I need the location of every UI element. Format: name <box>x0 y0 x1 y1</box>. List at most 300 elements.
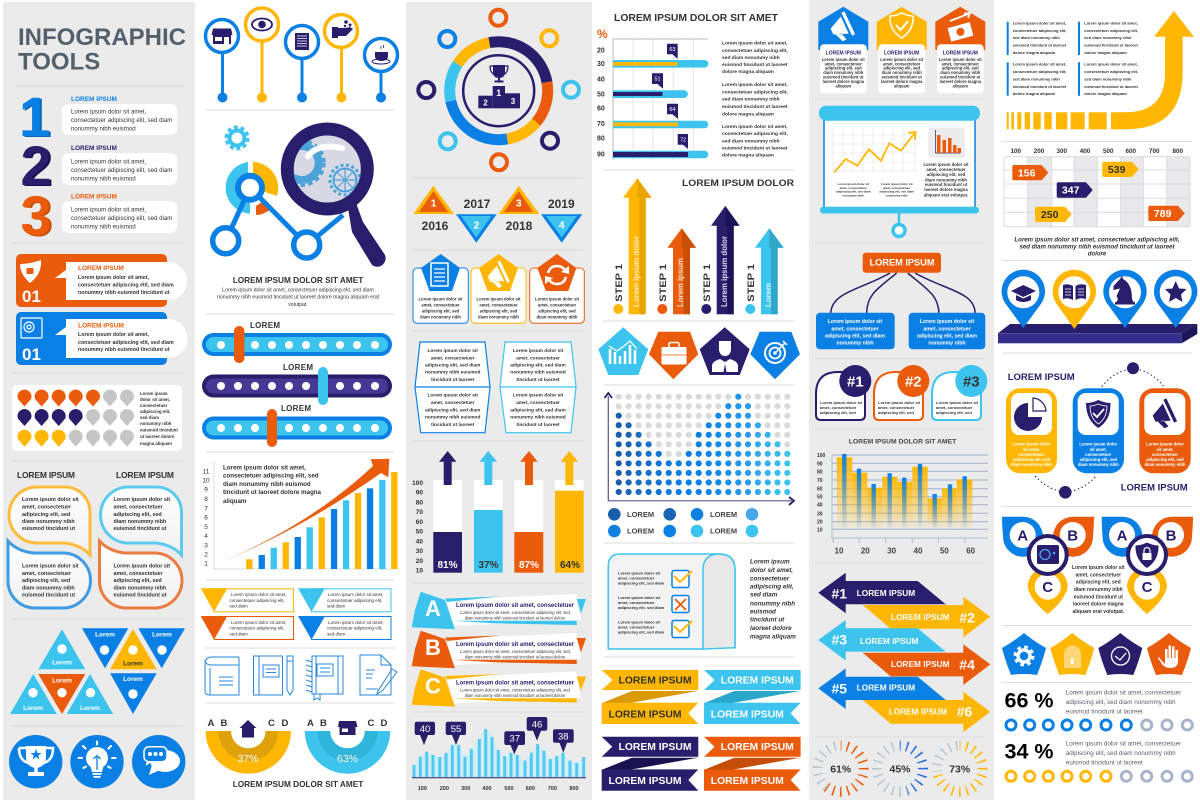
combo bar chart: 100 <box>817 453 826 459</box>
arrow: navy <box>701 206 740 314</box>
ribbon: cyan <box>704 670 801 724</box>
arrow: #5: LOREM IPSUM <box>857 684 916 693</box>
arrow: #3: #3 <box>832 631 847 647</box>
item 3: 3 <box>20 184 52 247</box>
step arrows: LOREM IPSUM DOLOR <box>682 178 794 189</box>
panel: orange card <box>16 254 187 307</box>
cycle cards: LOREM IPSUM <box>1121 482 1188 494</box>
growth bar chart: diam nonummy nibh euismod <box>223 481 311 488</box>
projector screen: diam nonummy nibh <box>925 178 967 182</box>
gauge: 73% <box>937 746 983 792</box>
triangles <box>10 628 185 714</box>
gauge: yellow: A <box>208 718 214 729</box>
arrow: #1: #1 <box>832 586 847 602</box>
timeline: 2 <box>474 220 480 232</box>
checklist scroll: magna aliquam <box>750 633 796 640</box>
checklist scroll: Lorem ipsum dolor sit <box>618 620 661 624</box>
slider 2 <box>202 363 392 405</box>
note: orange <box>201 616 294 640</box>
gauge: 61%: 61% <box>830 764 852 776</box>
area chart with callouts: 400 <box>482 786 492 792</box>
icon: eye <box>252 18 272 30</box>
checklist scroll: nonummy nibh <box>750 600 795 607</box>
icon: safe <box>21 318 42 338</box>
ribbon: navy <box>602 737 698 791</box>
horizontal bar chart: sed diam nonummy nibh <box>722 97 780 103</box>
bubble: yellow: diam nonummy nibh <box>22 519 75 525</box>
text columns: sed diam nonummy nibh <box>1084 76 1132 82</box>
stat: 66%: adipiscing elit, sed diam nonummy nibh <box>1066 699 1176 706</box>
horizontal bar chart: Lorem ipsum dolor sit amet, <box>722 82 788 88</box>
grid chart with tags: 400 <box>1080 148 1091 155</box>
arrow: #2 <box>863 597 990 637</box>
ABC description: amet, consectetuer <box>1076 572 1121 578</box>
card: megaphone: LOREM IPSUM <box>826 50 861 56</box>
combo bar chart: 60 <box>817 487 823 493</box>
title <box>18 24 186 76</box>
triangles: Lorem <box>80 705 100 712</box>
box: cyan: nonummy nibh euismod <box>510 370 566 376</box>
growth bar chart: 11 <box>203 468 210 476</box>
tag: 250 <box>1035 207 1072 222</box>
gauge: cyan: B <box>320 718 327 729</box>
item 3: consectetuer adipiscing elit, sed diam <box>71 215 172 222</box>
ribbon: cyan: LOREM IPSUM <box>721 676 794 686</box>
icon: house <box>240 720 256 738</box>
card: #2 <box>874 365 929 420</box>
gauge: cyan: D <box>380 718 388 729</box>
icon: briefcase <box>649 332 698 379</box>
ribbon: navy: LOREM IPSUM <box>618 742 692 753</box>
panel: blue card <box>16 312 188 365</box>
tag: 347 <box>1057 182 1093 198</box>
percent bars with arrows <box>412 451 584 574</box>
horizontal bar chart: dolore magna aliquam <box>722 69 775 75</box>
percent bars with arrows: 80 <box>416 500 423 506</box>
pin: star <box>1154 270 1197 328</box>
note: cyan: consectetuer adipiscing elit, <box>327 598 382 603</box>
icon: podium: 2 <box>483 98 488 108</box>
callout: 38: 38 <box>558 732 569 742</box>
icon: check <box>672 620 692 638</box>
arrow: cyan: Lorem <box>764 283 773 307</box>
arrow: navy: STEP 1 <box>702 263 713 302</box>
horizontal bar chart: sed diam nonummy nibh <box>722 138 780 144</box>
card: document: diam nonummy nibh <box>420 314 461 320</box>
icon: light bulb <box>70 735 124 788</box>
icon: gear <box>226 127 248 149</box>
triangles: Lorem <box>95 632 115 638</box>
growth bar chart: aliquam <box>223 498 247 505</box>
note: yellow: Lorem ipsum dolor sit amet, <box>231 592 287 597</box>
ABC cluster: lock: A <box>1117 528 1128 544</box>
text columns: dolore magna aliquam <box>1084 91 1127 96</box>
timeline: 2018 <box>506 219 533 233</box>
arrow: #5: #5 <box>832 681 847 697</box>
text columns: dolore magna aliquam <box>1013 91 1056 96</box>
bubble: blue: adipiscing elit, sed <box>22 578 70 584</box>
bubble: orange: diam nonummy nibh <box>114 586 166 592</box>
line icons <box>205 655 397 700</box>
triangles: Lorem <box>52 660 72 666</box>
card: refresh: Lorem ipsum dolor sit <box>535 296 580 302</box>
card: megaphone: amet, consectetuer <box>479 302 518 308</box>
growth bar chart: 10 <box>202 478 210 484</box>
card: #3 <box>932 365 987 420</box>
magnifier chart: nonummy nibh euismod tincidunt ut laoreet dolore magna aliquam erat <box>217 294 380 300</box>
horizontal bar chart: LOREM IPSUM DOLOR SIT AMET <box>614 12 779 24</box>
badge: gear <box>1002 633 1046 675</box>
percent bars with arrows: 100 <box>412 480 423 487</box>
bubble: yellow: amet, consectetuer <box>22 504 72 510</box>
note: orange: sed diam <box>230 632 248 636</box>
grid chart with tags: 100 <box>1010 148 1021 155</box>
card: megaphone: amet, consectetuer <box>825 61 862 66</box>
note: orange: Lorem ipsum dolor sit amet, <box>231 620 287 625</box>
note: yellow: sed diam <box>230 604 248 608</box>
callout: 63 <box>667 44 678 59</box>
bubble: cyan <box>100 487 182 555</box>
card: megaphone: sit amet, <box>1156 447 1174 452</box>
ABC description: euismod tincidunt ut <box>1074 594 1123 600</box>
projector screen: adipiscing elit, sed diam <box>836 190 871 194</box>
slider 1 <box>202 321 392 363</box>
percent bars with arrows: 50 <box>416 529 423 536</box>
arrow: cyan <box>745 228 784 314</box>
growth bar chart <box>202 459 398 569</box>
org chart: LOREM IPSUM <box>870 258 934 268</box>
note: cyan <box>298 588 391 612</box>
pie ring <box>226 162 278 215</box>
bubble: blue: Lorem ipsum dolor sit <box>22 564 79 570</box>
slider 2: LOREM <box>283 363 313 372</box>
ABC cluster: safe: A <box>1017 528 1028 544</box>
card: #1: Lorem ipsum dolor sit <box>820 400 863 405</box>
cycle cards <box>1006 362 1191 499</box>
text columns: sed diam nonummy nibh <box>1013 35 1060 40</box>
bubble: orange: amet, consectetuer <box>114 571 164 577</box>
timeline: 2019 <box>548 197 575 211</box>
star badges <box>1002 633 1191 675</box>
text columns: euismod tincidunt ut laoreet <box>1013 42 1067 48</box>
panel: pin rating: Lorem ipsum <box>140 391 168 396</box>
card: megaphone <box>1139 388 1191 473</box>
panel: pin rating: ut laoreet dolore <box>140 434 175 439</box>
callout: 37: 37 <box>509 734 520 744</box>
card: shield <box>877 7 927 93</box>
note: cyan: sed diam <box>327 604 346 608</box>
triangles: Lorem <box>23 705 43 712</box>
ranked cards <box>816 365 987 420</box>
card: megaphone: Lorem ipsum dolor sit <box>822 57 865 62</box>
checklist scroll: sed diam <box>750 592 778 599</box>
card: shield: consectetuer <box>1085 452 1112 457</box>
checklist scroll: Lorem ipsum <box>750 559 790 566</box>
checklist scroll: adipiscing elit, <box>750 584 794 591</box>
checklist scroll: laoreet dolore <box>750 625 792 632</box>
callout: 37 <box>504 731 525 754</box>
box: blue <box>415 342 490 433</box>
ribbon: yellow: LOREM IPSUM <box>618 676 692 686</box>
arrow: #5 <box>818 668 946 709</box>
box: blue: nonummy nibh euismod <box>425 370 480 376</box>
arrow: yellow <box>613 178 652 314</box>
icon: chart <box>598 327 648 375</box>
card: megaphone: consectetuer <box>1152 452 1178 457</box>
callout: 64: 64 <box>669 107 675 113</box>
callout: 40 <box>415 722 435 745</box>
pin: graduation cap <box>1002 270 1045 328</box>
magnifier chart <box>213 127 386 308</box>
banner A: Lorem ipsum dolor sit amet, consectetuer <box>456 602 574 609</box>
horizontal bar chart <box>597 12 788 160</box>
card: shield: euismod tincidunt ut <box>882 74 922 80</box>
text columns: consectetuer adipiscing elit, <box>1084 69 1138 74</box>
badge: clock <box>1098 633 1142 675</box>
gauge: 45% <box>877 746 923 792</box>
box: cyan: adipiscing elit, sed diam <box>510 363 566 369</box>
horizontal bar chart: 90 <box>597 152 605 158</box>
triangles: Lorem <box>123 660 143 668</box>
box: cyan: tincidunt ut laoreet <box>516 377 560 383</box>
combo bar chart: 20 <box>817 520 823 526</box>
box: cyan: Lorem ipsum dolor sit <box>513 393 564 399</box>
legend <box>608 508 758 537</box>
card: #1: adipiscing elit, sed <box>820 410 856 415</box>
box: blue: Lorem ipsum dolor sit <box>428 393 478 399</box>
grid chart with tags: 300 <box>1056 148 1067 155</box>
panel: orange card: consectetuer adipiscing elit, sed diam <box>78 282 174 288</box>
gauge: yellow: C <box>268 718 275 729</box>
percent bars with arrows: 70 <box>416 509 423 516</box>
item 3 <box>20 184 177 248</box>
card: document <box>413 254 468 323</box>
stat: 66%: Lorem ipsum dolor sit amet, consectetuer <box>1066 690 1181 696</box>
card: megaphone: adipiscing elit, sed <box>1146 457 1184 462</box>
growth bar chart: 5 <box>204 524 208 531</box>
tag: 156 <box>1012 165 1048 180</box>
growth bar chart: 7 <box>204 505 208 512</box>
card: megaphone: diam nonummy nibh <box>1145 462 1186 467</box>
combo bar chart: LOREM IPSUM DOLOR SIT AMET <box>849 438 956 446</box>
item 2: 2 <box>22 135 54 198</box>
horizontal bar chart: consectetuer adipiscing elit, <box>722 131 788 137</box>
percent bars with arrows: 40 <box>416 538 423 546</box>
callout: 63: 63 <box>669 47 675 53</box>
banner C <box>412 669 586 707</box>
bubble: blue: diam nonummy nibh <box>22 586 75 592</box>
bubble: cyan: euismod tincidunt ut <box>114 526 167 532</box>
card: megaphone: Lorem ipsum dolor sit <box>477 296 521 302</box>
mini bar chart <box>928 128 965 158</box>
area chart with callouts: 700 <box>548 786 557 792</box>
card: money: aliquam <box>953 83 968 88</box>
text columns: dolore magna aliquam <box>1013 50 1056 55</box>
box: blue: amet, consectetuer <box>431 400 475 406</box>
gauge: cyan: 63% <box>337 753 358 765</box>
checklist scroll: tincidunt ut <box>750 617 785 624</box>
banner C: Lorem ipsum dolor sit amet, consectetuer <box>456 680 574 686</box>
card: megaphone: Lorem ipsum dolor <box>1146 442 1184 446</box>
ABC description: diam nonummy nibh <box>1074 587 1123 593</box>
bubble: cyan: amet, consectetuer <box>114 504 164 510</box>
card: #2: Lorem ipsum dolor sit <box>878 400 921 405</box>
tag: 347: 347 <box>1062 185 1080 197</box>
card: #2: adipiscing elit, sed <box>878 410 914 415</box>
line chart <box>830 128 917 173</box>
grid chart with tags: sed diam nonummy nibh euismod tincidunt ut laoreet <box>1019 244 1175 250</box>
ribbon: cyan: LOREM IPSUM <box>711 710 784 720</box>
box: blue: adipiscing elit, sed diam <box>425 363 480 369</box>
card: shield: Lorem ipsum dolor <box>1079 442 1118 446</box>
horizontal bar chart: euismod tincidunt ut laoreet <box>722 104 788 110</box>
growth bar chart: Lorem ipsum dolor sit amet, <box>223 464 306 472</box>
ABC cluster: lock: B <box>1166 528 1177 544</box>
legend: LOREM <box>710 510 737 519</box>
percent bars with arrows: 20 <box>416 558 423 565</box>
card: pie <box>1006 388 1057 473</box>
gauge: 73%: 73% <box>949 764 971 776</box>
card: #3: adipiscing elit, sed <box>936 410 972 415</box>
gauge: yellow <box>206 718 291 774</box>
card: money: Lorem ipsum dolor sit <box>939 57 982 62</box>
icon: chat <box>132 735 185 788</box>
bubble: yellow: Lorem ipsum dolor sit <box>22 497 79 503</box>
stat: 34%: Lorem ipsum dolor sit amet, consectetuer <box>1066 741 1181 748</box>
icon: trophy <box>490 65 508 82</box>
box: cyan: amet, consectetuer <box>516 355 560 361</box>
pentagon cards <box>413 254 584 323</box>
horizontal bar chart: Lorem ipsum dolor sit amet, <box>722 40 788 46</box>
ribbon: yellow: LOREM IPSUM <box>608 710 682 720</box>
arrow: #4: #4 <box>959 656 975 672</box>
grid chart with tags: dolore <box>1088 251 1107 258</box>
banner B: B <box>425 635 441 660</box>
callout: 46 <box>527 717 547 741</box>
checklist scroll: consectetuer <box>750 575 790 582</box>
icon: lock shield <box>20 260 41 283</box>
bubble: orange: euismod tincidunt ut <box>114 593 167 599</box>
card: shield: diam nonummy nibh <box>1078 462 1119 467</box>
combo bar chart: 50 <box>940 546 949 556</box>
box: blue: adipiscing elit, sed diam <box>425 408 480 414</box>
icon: spiral notebook <box>306 656 343 700</box>
timeline <box>413 186 582 243</box>
arrow: #1 <box>818 573 946 613</box>
radial gauges <box>818 746 983 792</box>
projector screen: adipiscing elit, sed <box>927 172 966 177</box>
projector screen: amet, consectetuer <box>883 186 911 190</box>
combo bar chart <box>817 438 988 556</box>
grid chart with tags: 700 <box>1149 148 1160 155</box>
card: megaphone <box>471 254 526 323</box>
ABC cluster: safe: B <box>1067 528 1078 544</box>
card: shield: Lorem ipsum dolor sit <box>880 57 924 62</box>
bubble: orange <box>100 541 182 608</box>
ABC description: aliquam erat volutpat. <box>1072 609 1125 615</box>
banner B: Lorem ipsum dolor sit amet, consectetuer <box>456 641 574 648</box>
box: left: amet, consectetuer <box>831 326 879 332</box>
card: #3: #3 <box>963 374 980 390</box>
ribbon: orange <box>704 737 801 791</box>
card: shield <box>1073 388 1124 473</box>
numbered list <box>19 85 177 248</box>
ABC cluster: safe <box>1002 517 1094 614</box>
ABC description: Lorem ipsum dolor sit <box>1072 565 1125 571</box>
note: yellow: consectetuer adipiscing elit, <box>230 598 285 603</box>
item 3: Lorem ipsum dolor sit amet, <box>71 206 146 214</box>
note: blue <box>298 616 391 640</box>
checklist scroll: Lorem ipsum dolor sit <box>618 570 661 576</box>
pentagon icons <box>598 327 800 379</box>
item 1: LOREM IPSUM <box>71 96 117 103</box>
grid chart with tags: 200 <box>1034 148 1045 155</box>
icon: store <box>212 28 232 44</box>
donut with podium <box>418 10 579 170</box>
card: shield: diam nonummy nibh <box>882 70 922 75</box>
timeline: 1 <box>431 198 437 210</box>
card: megaphone: laoreet dolore magna <box>823 79 865 84</box>
note: cyan: Lorem ipsum dolor sit amet, <box>328 592 384 597</box>
item 3: 3 <box>22 185 54 248</box>
arrow: #1: LOREM IPSUM <box>857 589 916 598</box>
card: document: Lorem ipsum dolor sit <box>419 296 463 302</box>
percent bars with arrows: 10 <box>416 568 423 574</box>
checklist scroll: adipiscing elit, sed diam <box>618 630 665 634</box>
badge: hand <box>1147 633 1191 675</box>
growth bar chart: tincidunt ut laoreet dolore magna <box>223 489 322 496</box>
triangles: Lorem <box>52 678 72 684</box>
combo bar chart: 90 <box>817 461 823 467</box>
bubble: cyan: diam nonummy nibh <box>114 519 166 525</box>
panel: pin rating: adipiscing elit, <box>140 409 170 414</box>
text columns: sed diam nonummy nibh <box>1013 76 1060 82</box>
item 1: 1 <box>21 86 52 149</box>
item 2 <box>20 134 177 198</box>
tag: 156: 156 <box>1018 168 1036 180</box>
slider 3: LOREM <box>281 404 311 413</box>
icon: coffee cup <box>372 45 390 64</box>
stat: 34% <box>1004 739 1192 781</box>
card: shield: LOREM IPSUM <box>884 50 919 56</box>
map pins on platform <box>998 270 1197 343</box>
callout: 55: 55 <box>451 724 461 735</box>
text columns: euismod tincidunt ut laoreet <box>1084 42 1139 48</box>
arrow: yellow: Lorem ipsum dolor <box>632 236 641 307</box>
checklist scroll: Lorem ipsum dolor sit <box>618 595 661 600</box>
banner A: diam nonummy nibh euismod tincidunt ut laoreet dolore <box>465 616 566 620</box>
callout: 40: 40 <box>420 724 430 735</box>
magnifier chart: volutpat. <box>288 302 308 308</box>
ribbon: orange: LOREM IPSUM <box>721 742 794 753</box>
card: money <box>935 7 985 93</box>
growth bar chart: 6 <box>204 514 208 522</box>
growth bar chart: consectetuer adipiscing elit, sed <box>223 472 319 480</box>
arrow <box>219 459 389 563</box>
pin: open book <box>1053 270 1096 329</box>
stat: 34%: 34 % <box>1004 739 1054 763</box>
growth bar chart: 1 <box>204 560 208 568</box>
speech bubbles: LOREM IPSUM <box>116 470 174 480</box>
grid chart with tags <box>1004 148 1190 258</box>
combo bar chart: 40 <box>914 546 923 556</box>
card: megaphone: diam nonummy nibh <box>478 314 519 320</box>
projector screen: nonummy nibh <box>886 194 908 198</box>
projector screen: nonummy nibh <box>843 194 864 198</box>
arrow: cyan: STEP 1 <box>746 263 757 302</box>
arrow: #6: #6 <box>957 703 972 719</box>
card: money: adipiscing elit, sed <box>942 66 979 71</box>
